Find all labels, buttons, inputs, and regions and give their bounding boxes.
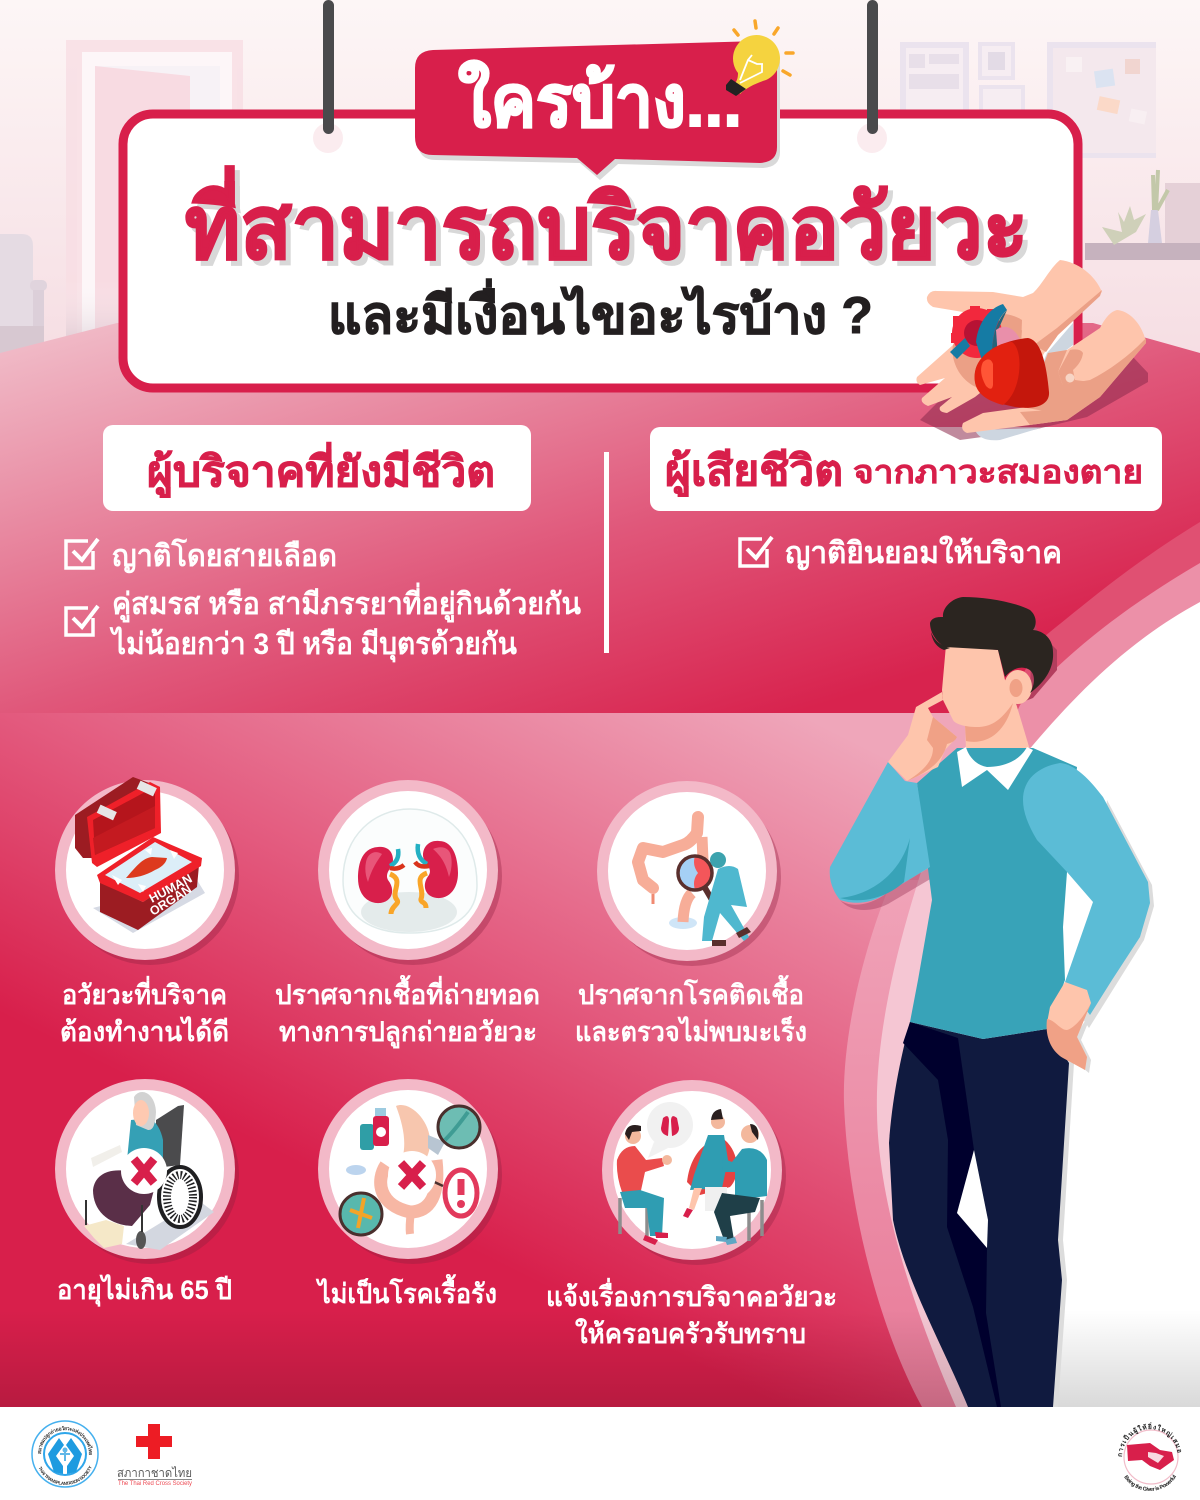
checklist: living donor conditions	[66, 537, 581, 663]
checklist: living donor conditions: ญาติโดยสายเลือด	[112, 537, 337, 574]
caption: tell family	[546, 1277, 837, 1349]
right hand	[1047, 982, 1091, 1070]
icon: checkbox	[66, 539, 98, 568]
item: free of transmissible infection	[318, 780, 502, 965]
background: lower panel	[0, 713, 1200, 1407]
caption: free of infection and cancer: ปราศจากโรคติดเชื้อ	[578, 974, 804, 1010]
logo: Thai Red Cross: สภากาชาดไทย	[117, 1466, 192, 1480]
card: deceased donor heading	[650, 427, 1162, 511]
icon: hands holding heart	[916, 260, 1148, 440]
cast shadows	[1005, 800, 1154, 1407]
hanging peg right	[857, 123, 887, 153]
title panel	[123, 0, 1078, 388]
background: room wall	[0, 0, 1200, 400]
trousers	[889, 1022, 1069, 1407]
checklist: living donor conditions: คู่สมรส หรือ สามีภรรยาที่อยู่กินด้วยกัน	[112, 582, 581, 623]
item: tell family	[602, 1080, 786, 1265]
caption: free of transmissible infection: ทางการปลูกถ่ายอวัยวะ	[279, 1017, 537, 1049]
illustration: thinking man	[830, 597, 1154, 1407]
item: organ must function well	[55, 777, 239, 965]
background: bottom shade	[0, 1310, 1200, 1407]
logo: Being the Giver is Powerful	[1118, 1422, 1182, 1491]
caption: tell family: แจ้งเรื่องการบริจาคอวัยวะ	[546, 1277, 837, 1312]
gap between legs	[957, 1150, 988, 1248]
item: free of infection and cancer	[597, 781, 781, 966]
icon: kidneys in dome	[343, 809, 477, 933]
card: living donor heading	[103, 425, 531, 511]
logo: Thai Red Cross: The Thai Red Cross Society	[118, 1481, 192, 1487]
icon: organ cooler box: ORGAN	[147, 882, 194, 919]
upper hand	[916, 260, 1102, 413]
background: faded wall boards	[900, 42, 1156, 158]
item: age under 65	[55, 1079, 239, 1264]
item: no chronic disease	[318, 1079, 502, 1264]
left sleeve	[830, 762, 930, 903]
neck	[965, 700, 1030, 775]
caption: organ must function well: ต้องทำงานได้ดี	[60, 1016, 229, 1047]
hanging bar left	[323, 0, 334, 134]
background: floor	[0, 323, 1200, 720]
hanging bar right	[867, 0, 878, 134]
icon: elderly in wheelchair	[84, 1092, 214, 1250]
card: living donor heading: ผู้บริจาคที่ยังมีชีวิต	[147, 442, 495, 498]
heart	[950, 304, 1049, 408]
lower hand	[962, 310, 1146, 433]
icon: checkbox	[66, 606, 98, 635]
logo: transplantation society: THAI TRANSPLANTATION SOCIETY	[38, 1466, 92, 1485]
logo: transplantation society	[31, 1420, 99, 1488]
subtitle: และมีเงื่อนไขอะไรบ้าง ?	[328, 279, 873, 345]
footer background	[0, 1407, 1200, 1500]
heading text: ใครบ้าง...	[458, 59, 742, 142]
card: deceased donor heading: จากภาวะสมองตาย	[853, 454, 1143, 490]
icon: intestine and inspector	[638, 817, 751, 946]
caption: tell family: ให้ครอบครัวรับทราบ	[575, 1318, 806, 1349]
icon: family talking	[617, 1102, 767, 1245]
logo: Being the Giver is Powerful: Being the Giver is Powerful	[1124, 1474, 1176, 1491]
caption: free of infection and cancer: และตรวจไม่พบมะเร็ง	[575, 1014, 807, 1047]
caption: free of transmissible infection	[275, 974, 540, 1049]
caption: free of infection and cancer	[575, 974, 807, 1047]
card: deceased donor heading: ผู้เสียชีวิต	[665, 447, 843, 497]
logo: Being the Giver is Powerful: การเป็นผู้ให้ยิ่งใหญ่เสมอ	[1118, 1422, 1182, 1457]
logo: transplantation society: สมาคมปลูกถ่ายอวัยวะแห่งประเทศไทย	[38, 1426, 93, 1455]
icon: organ cooler box: HUMAN	[147, 871, 194, 906]
trousers inner shade	[903, 1022, 1001, 1407]
icon: light bulb	[726, 21, 793, 96]
logo: Thai Red Cross	[117, 1424, 192, 1487]
caption: free of transmissible infection: ปราศจากเชื้อที่ถ่ายทอด	[275, 974, 540, 1010]
main title: ที่สามารถบริจาคอวัยวะ	[190, 171, 1033, 282]
background: curved bands behind person	[844, 522, 1200, 1407]
checklist: deceased donor condition: ญาติยินยอมให้บริจาค	[785, 535, 1062, 571]
background: shelf with plants	[1085, 170, 1200, 260]
main title: ที่สามารถบริจาคอวัยวะ	[185, 166, 1028, 277]
icon: organ cooler box	[75, 777, 205, 933]
caption: age under 65: อายุไม่เกิน 65 ปี	[57, 1274, 232, 1307]
background: faded door and chair	[0, 40, 243, 353]
icon: digestive system warning	[340, 1105, 480, 1235]
hair	[930, 597, 1053, 693]
column divider	[604, 452, 609, 653]
caption: organ must function well: อวัยวะที่บริจาค	[62, 975, 227, 1010]
hanging peg left	[313, 123, 343, 153]
icon: checkbox	[740, 537, 772, 566]
checklist: living donor conditions: ไม่น้อยกว่า 3 ปี หรือ มีบุตรด้วยกัน	[109, 626, 517, 663]
caption: no chronic disease: ไม่เป็นโรคเรื้อรัง	[315, 1273, 497, 1309]
sweater body	[910, 748, 1077, 1039]
collar	[957, 747, 1033, 790]
heading tag: who	[415, 21, 793, 180]
thinking hand	[888, 692, 957, 781]
right sleeve	[1023, 763, 1150, 1015]
head	[942, 645, 1017, 727]
hair shadow	[1015, 613, 1057, 705]
caption: organ must function well	[60, 975, 229, 1047]
